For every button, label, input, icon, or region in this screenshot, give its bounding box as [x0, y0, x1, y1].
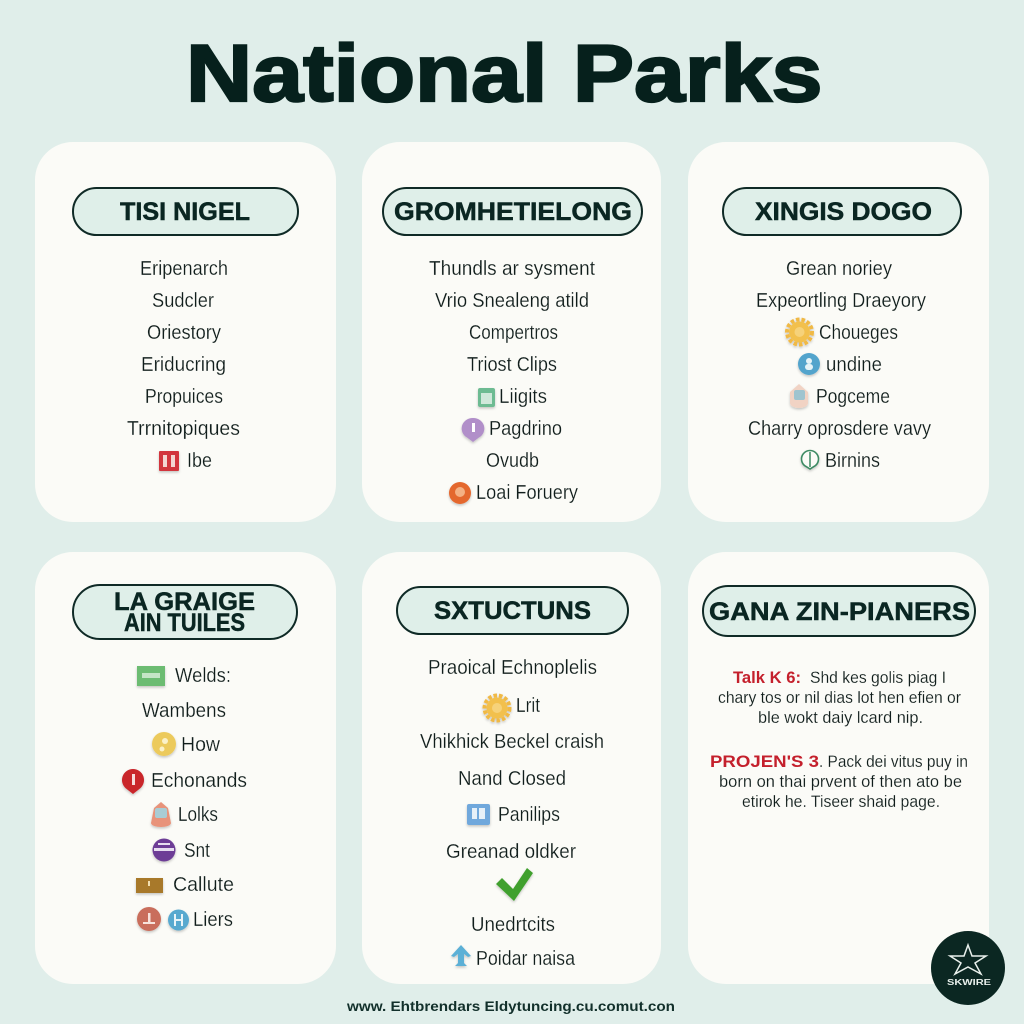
- icon: tent: [151, 802, 171, 827]
- heading: La Graige Ain Tuiles: AIN TUILES: [124, 609, 245, 637]
- list: La Graige items: Echonands: [151, 770, 247, 792]
- icon: red pin: [122, 769, 144, 794]
- list: Xingis Dogo items: Pogceme: [816, 386, 890, 408]
- icon: green tag: [137, 666, 165, 686]
- list: Xingis Dogo items: Grean noriey: [786, 258, 892, 280]
- list: Tisi Nigel items: Eriducring: [141, 354, 226, 376]
- list: Xingis Dogo items: Birnins: [825, 450, 880, 472]
- icon: green tile: [478, 388, 495, 407]
- list: Sxtuctuns items: Lrit: [516, 695, 540, 717]
- list: Tisi Nigel items: Sudcler: [152, 290, 214, 312]
- list: La Graige items: Callute: [173, 874, 234, 896]
- list: Tisi Nigel items: Propuices: [145, 386, 223, 408]
- list: Tisi Nigel items: [127, 258, 240, 472]
- list: Xingis Dogo items: Charry oprosdere vavy: [748, 418, 931, 440]
- heading: Tisi Nigel: [73, 188, 298, 235]
- list: La Graige items: Snt: [184, 840, 210, 862]
- text block: Projen's 3: PROJEN'S 3: [710, 752, 819, 771]
- icon: blue drop: [798, 353, 820, 375]
- list: Tisi Nigel items: Trrnitopiques: [127, 418, 240, 440]
- panel: Xingis Dogo: [688, 142, 989, 522]
- list: La Graige items: Liers: [193, 909, 233, 931]
- list: Gromhetielong items: Loai Foruery: [476, 482, 578, 504]
- heading: Xingis Dogo: [723, 188, 961, 235]
- heading: Gromhetielong: [383, 188, 642, 235]
- text block: Talk K 6: ble wokt daiy lcard nip.: [758, 708, 923, 727]
- list: Xingis Dogo items: Expeortling Draeyory: [756, 290, 926, 312]
- text block: Projen's 3: [710, 752, 968, 811]
- list: Sxtuctuns items: Unedrtcits: [471, 914, 555, 936]
- panel: Gromhetielong: [362, 142, 661, 522]
- list: La Graige items: How: [181, 734, 221, 756]
- list: Xingis Dogo items: Choueges: [819, 322, 898, 344]
- icon: purple pin: [462, 418, 484, 442]
- list: Sxtuctuns items: Vhikhick Beckel craish: [420, 731, 604, 753]
- panel: Gana Zin-Pianers: [688, 552, 989, 984]
- list: Gromhetielong items: Vrio Snealeng atild: [435, 290, 589, 312]
- icon: sun: [484, 696, 510, 720]
- heading: Tisi Nigel: TISI NIGEL: [120, 198, 250, 226]
- text block: Projen's 3: . Pack dei vitus puy in: [819, 752, 968, 771]
- heading: Xingis Dogo: XINGIS DOGO: [755, 198, 932, 226]
- list: Gromhetielong items: Ovudb: [486, 450, 539, 472]
- icon: blue square: [467, 804, 490, 825]
- list: Sxtuctuns items: Praoical Echnoplelis: [428, 657, 597, 679]
- footer url: www. Ehtbrendars Eldytuncing.cu.comut.con: [346, 998, 675, 1014]
- list: Sxtuctuns items: Panilips: [498, 804, 560, 826]
- panel: Tisi Nigel: [35, 142, 336, 522]
- icon: blue circle: [168, 910, 189, 930]
- list: Sxtuctuns items: Poidar naisa: [476, 948, 576, 970]
- list: Sxtuctuns items: Greanad oldker: [446, 841, 576, 863]
- badge: star logo: SKWIRE: [947, 978, 992, 987]
- list: Sxtuctuns items: [420, 657, 604, 970]
- icon: blue anchor: [451, 945, 471, 966]
- panel: La Graige Ain Tuiles: [35, 552, 336, 984]
- heading: Gana Zin-Pianers: [703, 586, 975, 636]
- list: Sxtuctuns items: Nand Closed: [458, 768, 566, 790]
- text block: Talk K 6: Talk K 6:: [733, 668, 801, 687]
- list: Xingis Dogo items: undine: [826, 354, 882, 376]
- text block: Talk K 6: [718, 668, 961, 727]
- heading: La Graige Ain Tuiles: [73, 585, 297, 639]
- title: National Parks: [186, 29, 822, 119]
- list: Gromhetielong items: Liigits: [499, 386, 547, 408]
- icon: rust pin: [137, 907, 161, 931]
- icon: purple bridge: [152, 838, 176, 862]
- text block: Talk K 6: chary tos or nil dias lot hen efien or: [718, 688, 961, 707]
- icon: brown folder: [136, 878, 163, 893]
- text block: Projen's 3: born on thai prvent of then ato be: [719, 772, 962, 791]
- icon: yellow circle: [152, 732, 176, 756]
- list: Tisi Nigel items: Eripenarch: [140, 258, 228, 280]
- list: La Graige items: Wambens: [142, 700, 226, 722]
- icon: tent badge: [790, 384, 808, 408]
- list: Gromhetielong items: Triost Clips: [467, 354, 557, 376]
- heading: Sxtuctuns: SXTUCTUNS: [434, 597, 591, 625]
- icon: green check: [496, 868, 533, 901]
- list: Tisi Nigel items: Ibe: [187, 450, 212, 472]
- text block: Projen's 3: etirok he. Tiseer shaid page.: [742, 792, 940, 811]
- list: Gromhetielong items: Thundls ar sysment: [429, 258, 595, 280]
- heading: Gana Zin-Pianers: GANA ZIN-PIANERS: [709, 598, 970, 626]
- list: Tisi Nigel items: Oriestory: [147, 322, 221, 344]
- panel: Sxtuctuns: [362, 552, 661, 984]
- text block: Talk K 6: Shd kes golis piag I: [810, 668, 946, 687]
- badge: star logo: [931, 931, 1005, 1005]
- heading: La Graige Ain Tuiles: LA GRAIGE: [114, 588, 255, 616]
- list: Gromhetielong items: [429, 258, 595, 504]
- list: Gromhetielong items: Pagdrino: [489, 418, 562, 440]
- list: Gromhetielong items: Compertros: [469, 322, 558, 344]
- list: Xingis Dogo items: [748, 258, 931, 472]
- icon: red square: [159, 451, 179, 471]
- icon: orange circle: [449, 482, 471, 504]
- list: La Graige items: Lolks: [178, 804, 218, 826]
- icon: sun: [787, 320, 812, 344]
- list: La Graige items: Welds:: [175, 665, 231, 687]
- heading: Gromhetielong: GROMHETIELONG: [394, 198, 632, 226]
- icon: green outline pin: [802, 451, 818, 469]
- list: La Graige items: [142, 665, 247, 931]
- heading: Sxtuctuns: [397, 587, 628, 634]
